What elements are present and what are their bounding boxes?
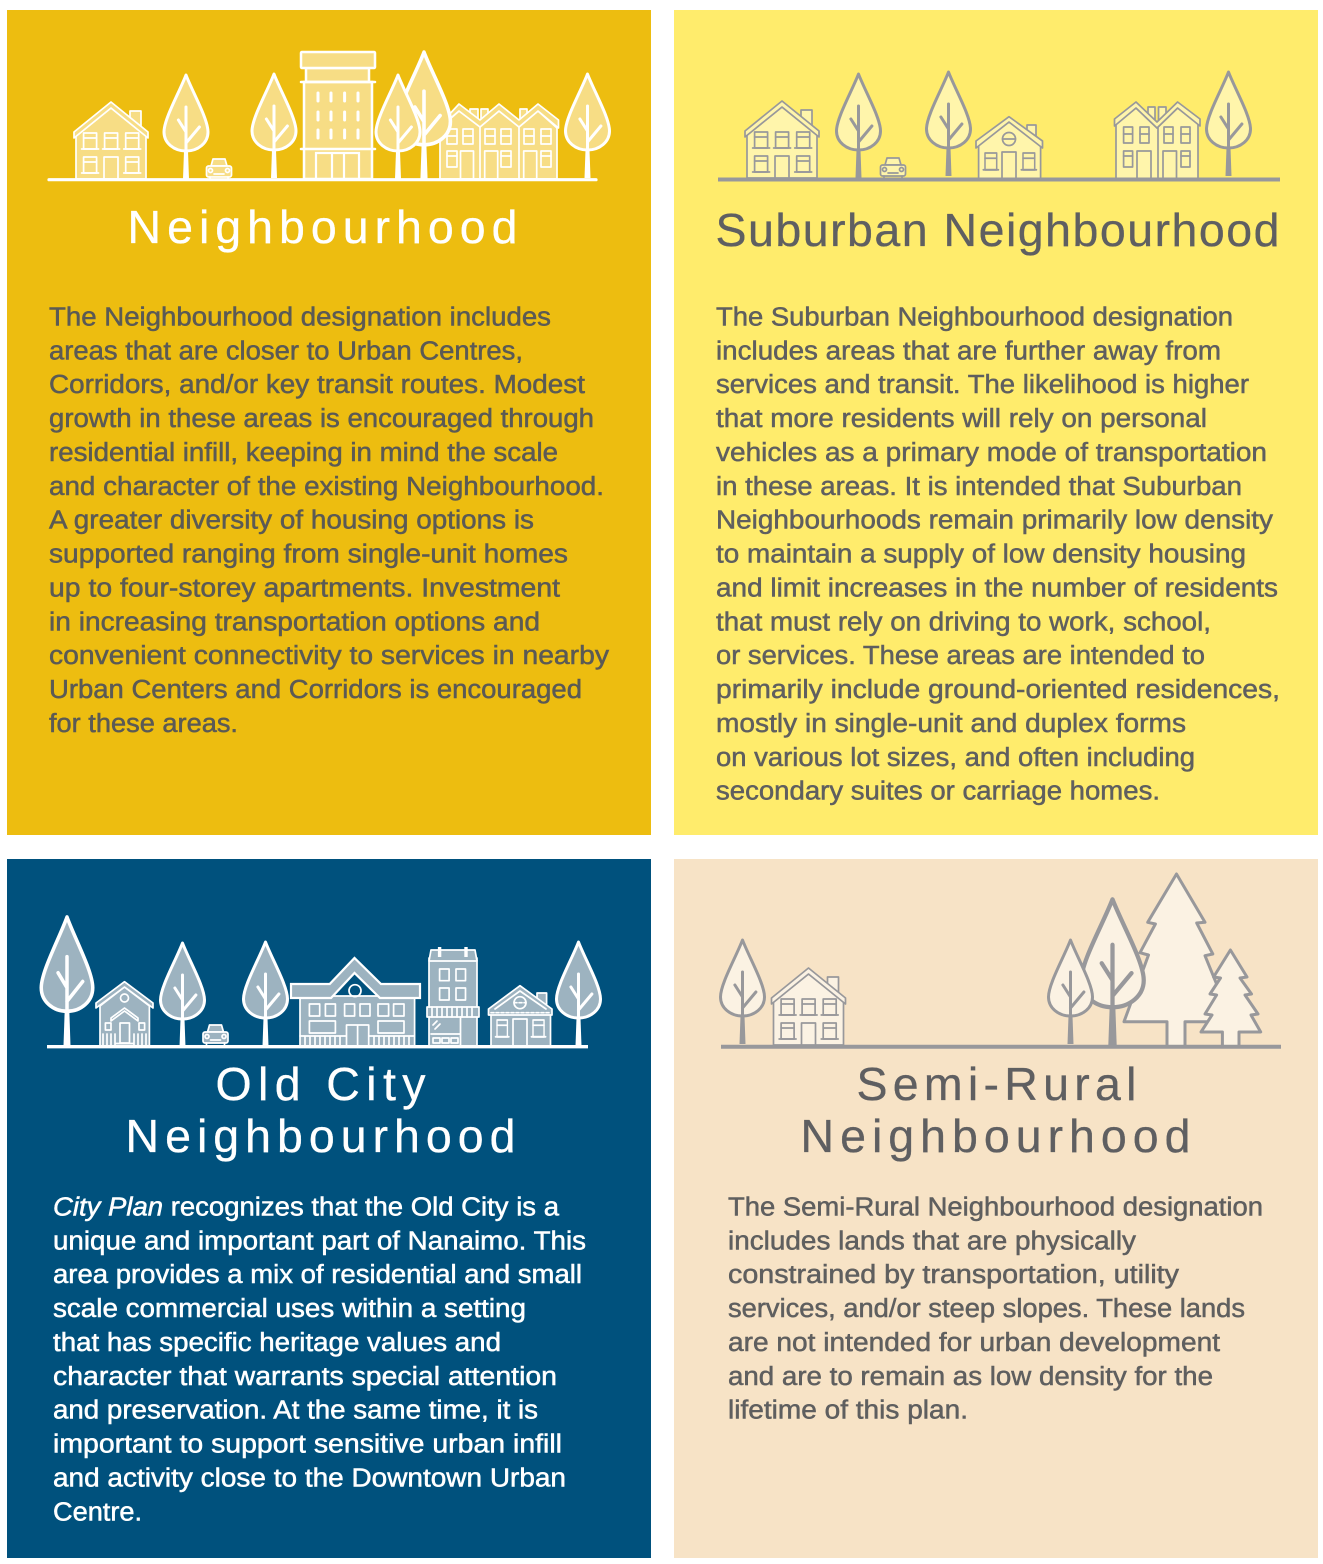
body text: residential infill, keeping in mind the scale (49, 439, 558, 467)
heading: Semi-Rural (856, 1058, 1136, 1110)
ground line (721, 1045, 1281, 1049)
icon: car (880, 158, 906, 178)
illustration: suburban streetscape (718, 72, 1280, 180)
body text: are not intended for urban development (728, 1329, 1220, 1357)
heading: Neighbourhood (126, 1110, 516, 1162)
body text: and are to remain as low density for the (728, 1363, 1213, 1391)
body text: constrained by transportation, utility (728, 1261, 1179, 1289)
body text (49, 304, 609, 738)
icon: tree (1048, 940, 1092, 1044)
body text: important to support sensitive urban infill (53, 1431, 562, 1459)
heading: Old City (216, 1058, 426, 1110)
icon: tree (164, 75, 208, 179)
icon: tree (376, 75, 420, 179)
icon: house (772, 968, 846, 1045)
body text: services and transit. The likelihood is higher (716, 371, 1250, 399)
body text: includes areas that are further away from (716, 337, 1221, 365)
icon: tree (566, 74, 610, 178)
body text: and activity close to the Downtown Urban (53, 1464, 566, 1492)
body text: for these areas. (49, 710, 238, 738)
icon: house (745, 101, 819, 178)
illustration: neighbourhood streetscape (49, 52, 610, 180)
icon: house (74, 102, 148, 179)
ground line (47, 1045, 588, 1048)
heading: Suburban Neighbourhood (716, 204, 1280, 256)
body text: and character of the existing Neighbourhood. (49, 473, 604, 501)
body text: Corridors, and/or key transit routes. Modest (49, 371, 585, 399)
ground line (718, 178, 1280, 182)
body text: growth in these areas is encouraged through (49, 405, 594, 433)
body text: or services. These areas are intended to (716, 642, 1205, 670)
panel background (7, 10, 651, 835)
body text (716, 304, 1280, 806)
body text (53, 1194, 586, 1526)
panel: Old City Neighbourhood (7, 859, 651, 1558)
heading: Neighbourhood (800, 1110, 1190, 1162)
icon: tree (1206, 72, 1250, 176)
icon: tree (556, 942, 600, 1046)
heading: Neighbourhood (128, 201, 518, 253)
icon: small pine tree (1201, 950, 1261, 1047)
body text: area provides a mix of residential and small (53, 1261, 582, 1289)
illustration: old city streetscape (41, 917, 600, 1047)
body text: and limit increases in the number of residents (716, 574, 1278, 602)
body text: to maintain a supply of low density housing (716, 541, 1246, 569)
body text: supported ranging from single-unit homes (49, 541, 568, 569)
body text: that more residents will rely on personal (716, 405, 1207, 433)
icon: tree (836, 74, 880, 178)
icon: tall tree (398, 52, 450, 179)
body text: primarily include ground-oriented residences, (716, 676, 1280, 704)
icon: tree (926, 72, 970, 176)
icon: townhouses (440, 104, 558, 179)
body text: character that warrants special attention (53, 1363, 557, 1391)
panel background (7, 859, 651, 1558)
icon: large tree (1081, 899, 1144, 1047)
icon: tree (244, 942, 288, 1046)
icon: large tree (41, 917, 93, 1046)
heading (126, 1058, 516, 1162)
icon: small house (976, 117, 1042, 179)
body text: City Plan recognizes that the Old City is a (53, 1194, 560, 1222)
body text: includes lands that are physically (728, 1227, 1136, 1255)
icon: big pine tree (1124, 874, 1232, 1047)
icon: heritage building (291, 958, 420, 1046)
body text: in these areas. It is intended that Suburban (716, 473, 1242, 501)
body text: lifetime of this plan. (728, 1397, 968, 1425)
panel: Semi-Rural Neighbourhood (674, 859, 1318, 1558)
body text: Neighbourhoods remain primarily low density (716, 507, 1273, 535)
body text: scale commercial uses within a setting (53, 1295, 526, 1323)
body text: Centre. (53, 1498, 142, 1526)
icon: apartment tower (301, 52, 375, 179)
panel background (674, 859, 1318, 1558)
panel: Neighbourhood (7, 10, 651, 835)
body text: unique and important part of Nanaimo. This (53, 1227, 586, 1255)
body text: up to four-storey apartments. Investment (49, 574, 560, 602)
icon: small heritage house (488, 986, 552, 1046)
body text: that has specific heritage values and (53, 1329, 501, 1357)
icon: car (203, 1025, 228, 1045)
body text: secondary suites or carriage homes. (716, 778, 1160, 806)
icon: tree (720, 940, 764, 1044)
body text: mostly in single-unit and duplex forms (716, 710, 1186, 738)
body text: that must rely on driving to work, school, (716, 608, 1211, 636)
icon: duplex (1114, 102, 1200, 179)
panel: Suburban Neighbourhood (674, 10, 1318, 835)
illustration: semi-rural landscape (720, 874, 1281, 1047)
body text (728, 1194, 1263, 1425)
body text: and preservation. At the same time, it is (53, 1397, 538, 1425)
icon: tree (252, 74, 296, 178)
body text: services, and/or steep slopes. These lands (728, 1295, 1245, 1323)
body text: The Semi-Rural Neighbourhood designation (728, 1194, 1263, 1222)
body text: on various lot sizes, and often including (716, 744, 1195, 772)
body text: areas that are closer to Urban Centres, (49, 337, 523, 365)
icon: cottage (96, 982, 153, 1046)
body text: in increasing transportation options and (49, 608, 540, 636)
ground line (49, 178, 596, 181)
body text: vehicles as a primary mode of transportation (716, 439, 1267, 467)
panel background (674, 10, 1318, 835)
body text: The Suburban Neighbourhood designation (716, 304, 1233, 332)
body text: Urban Centers and Corridors is encouraged (49, 676, 582, 704)
body text: A greater diversity of housing options is (49, 507, 534, 535)
body text: convenient connectivity to services in nearby (49, 642, 609, 670)
heading (800, 1058, 1190, 1162)
icon: tree (160, 943, 204, 1047)
body text: The Neighbourhood designation includes (49, 304, 551, 332)
icon: shop building (427, 947, 479, 1046)
icon: car (206, 159, 232, 179)
